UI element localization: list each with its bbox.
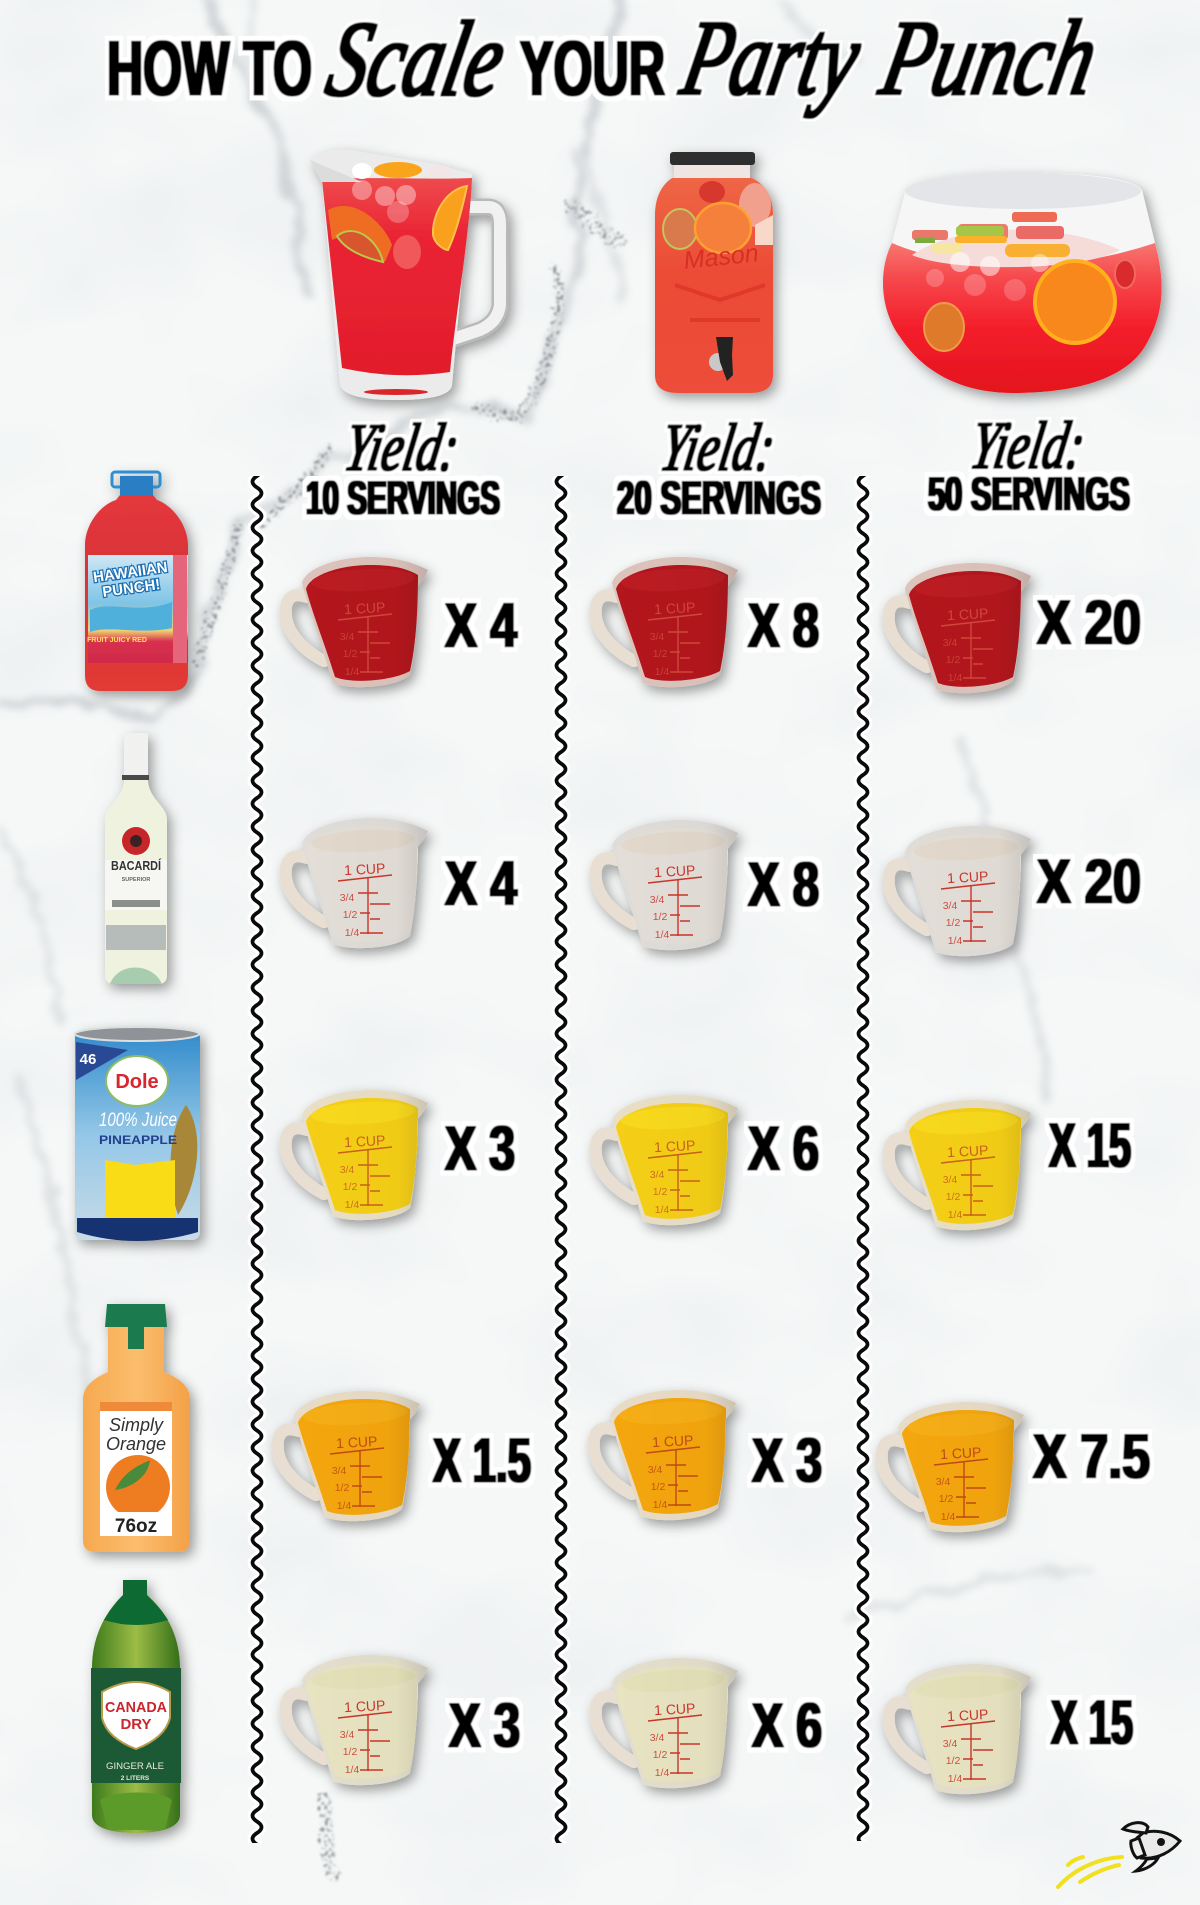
cup row 3: pineapple juice, 20 servings: 1/2 — [653, 1186, 667, 1198]
multiplier: x 6: X 6 — [748, 1114, 819, 1184]
cup row 5: ginger ale, 20 servings: 1/2 — [653, 1749, 667, 1761]
pitcher of punch — [310, 150, 500, 400]
cup row 2: rum, 20 servings — [596, 820, 738, 950]
cup row 3: pineapple juice, 50 servings: 1/2 — [946, 1191, 960, 1203]
cup row 1: punch, 10 servings: 1 CUP — [344, 599, 386, 617]
cup row 2: rum, 50 servings — [889, 826, 1031, 956]
cup row 4: orange juice, 50 servings: 1/2 — [939, 1493, 953, 1505]
cup row 4: orange juice, 10 servings: 1/2 — [335, 1482, 349, 1494]
yield script: Yield: — [965, 407, 1091, 483]
title: punch script: Punch — [871, 0, 1107, 118]
cup row 5: ginger ale, 50 servings: 1/4 — [948, 1773, 962, 1785]
cup row 1: punch, 20 servings: 3/4 — [650, 631, 664, 643]
title: scale script: Scale — [318, 0, 515, 119]
title: your: YOUR — [520, 24, 665, 112]
cup row 4: orange juice, 20 servings: 1/2 — [651, 1481, 665, 1493]
brand line 2: DRY — [120, 1716, 152, 1733]
multiplier: x 15: X 15 — [1049, 1111, 1131, 1181]
brand name: HAWAIIAN — [92, 559, 169, 586]
cup row 3: pineapple juice, 10 servings: 1 CUP — [344, 1132, 386, 1150]
multiplier: x 1.5: X 1.5 — [433, 1426, 531, 1496]
cup row 2: rum, 50 servings: 3/4 — [943, 900, 957, 912]
cup row 2: rum, 10 servings — [286, 818, 428, 948]
cup row 3: pineapple juice, 50 servings: 1 CUP — [947, 1142, 989, 1160]
cup row 5: ginger ale, 20 servings: 3/4 — [650, 1732, 664, 1744]
cup row 4: orange juice, 10 servings: 3/4 — [332, 1465, 346, 1477]
bottle: simply orange juice — [83, 1304, 190, 1552]
cup row 2: rum, 10 servings: 3/4 — [340, 892, 354, 904]
multiplier: x 20: X 20 — [1037, 847, 1141, 917]
cup row 1: punch, 10 servings: 3/4 — [340, 631, 354, 643]
cup row 4: orange juice, 20 servings: 1/4 — [653, 1499, 667, 1511]
cup row 3: pineapple juice, 20 servings — [596, 1095, 738, 1225]
cup row 5: ginger ale, 50 servings: 1 CUP — [947, 1706, 989, 1724]
brand name: BACARDÍ — [111, 858, 161, 873]
title — [107, 0, 1107, 119]
yield header: 20 servings — [617, 409, 821, 524]
cup row 3: pineapple juice, 50 servings: 1/4 — [948, 1209, 962, 1221]
cup row 5: ginger ale, 20 servings: 1/4 — [655, 1767, 669, 1779]
cup row 1: punch, 50 servings: 3/4 — [943, 637, 957, 649]
multiplier: x 4: X 4 — [445, 849, 517, 919]
servings count: 20 SERVINGS — [617, 471, 821, 524]
multiplier: x 15: X 15 — [1051, 1688, 1133, 1758]
cup row 2: rum, 10 servings: 1 CUP — [344, 860, 386, 878]
cup row 4: orange juice, 50 servings — [882, 1402, 1024, 1532]
cup row 5: ginger ale, 10 servings: 1 CUP — [344, 1697, 386, 1715]
cup row 5: ginger ale, 20 servings: 1 CUP — [654, 1700, 696, 1718]
cup row 1: punch, 20 servings — [596, 557, 738, 687]
size: 76oz — [115, 1516, 157, 1537]
multiplier: x 20: X 20 — [1037, 588, 1141, 658]
cup row 1: punch, 10 servings — [286, 557, 428, 687]
multiplier: x 3: X 3 — [752, 1426, 822, 1496]
bottle: bacardi rum — [105, 733, 167, 984]
cup row 3: pineapple juice, 10 servings: 1/2 — [343, 1181, 357, 1193]
flavor: FRUIT JUICY RED — [87, 637, 147, 644]
title: how to: HOW TO — [107, 24, 312, 112]
punch bowl — [883, 173, 1162, 393]
yield script: Yield: — [339, 409, 465, 485]
cup row 1: punch, 50 servings: 1/2 — [946, 654, 960, 666]
cup row 2: rum, 10 servings: 1/4 — [345, 927, 359, 939]
multiplier: x 8: X 8 — [748, 850, 819, 920]
cup row 4: orange juice, 20 servings: 3/4 — [648, 1464, 662, 1476]
title: party script: Party — [672, 0, 871, 118]
brand line 2: Orange — [106, 1434, 166, 1454]
cup row 5: ginger ale, 50 servings: 1/2 — [946, 1755, 960, 1767]
juice claim: 100% Juice — [99, 1110, 177, 1131]
multiplier: x 4: X 4 — [445, 591, 517, 661]
variety: SUPERIOR — [122, 877, 150, 883]
brand line 1: Simply — [109, 1415, 164, 1435]
cup row 5: ginger ale, 10 servings: 1/4 — [345, 1764, 359, 1776]
multiplier: x 3: X 3 — [445, 1114, 515, 1184]
cup row 3: pineapple juice, 20 servings: 1 CUP — [654, 1137, 696, 1155]
multiplier: x 3: X 3 — [449, 1691, 520, 1761]
cup row 5: ginger ale, 10 servings: 1/2 — [343, 1746, 357, 1758]
brand line 1: CANADA — [105, 1699, 167, 1716]
drink dispenser jar — [655, 152, 773, 393]
cup row 1: punch, 50 servings — [889, 563, 1031, 693]
cup row 3: pineapple juice, 10 servings: 3/4 — [340, 1164, 354, 1176]
weight: 46 — [80, 1051, 96, 1068]
cup row 3: pineapple juice, 20 servings: 1/4 — [655, 1204, 669, 1216]
cup row 2: rum, 20 servings: 1/2 — [653, 911, 667, 923]
cup row 1: punch, 10 servings: 1/4 — [345, 666, 359, 678]
cup row 4: orange juice, 20 servings: 1 CUP — [652, 1432, 694, 1450]
cup row 1: punch, 20 servings: 1 CUP — [654, 599, 696, 617]
product: GINGER ALE — [106, 1761, 164, 1771]
cup row 5: ginger ale, 50 servings: 3/4 — [943, 1738, 957, 1750]
cup row 3: pineapple juice, 10 servings: 1/4 — [345, 1199, 359, 1211]
cup row 2: rum, 50 servings: 1 CUP — [947, 868, 989, 886]
cup row 3: pineapple juice, 10 servings — [286, 1090, 428, 1220]
multiplier: x 6: X 6 — [752, 1691, 822, 1761]
cup row 5: ginger ale, 10 servings: 3/4 — [340, 1729, 354, 1741]
cup row 1: punch, 10 servings: 1/2 — [343, 648, 357, 660]
bottle: canada dry ginger ale — [91, 1580, 181, 1833]
cup row 3: pineapple juice, 20 servings: 3/4 — [650, 1169, 664, 1181]
cup row 5: ginger ale, 10 servings — [286, 1655, 428, 1785]
cup row 2: rum, 20 servings: 3/4 — [650, 894, 664, 906]
cup row 2: rum, 50 servings: 1/2 — [946, 917, 960, 929]
cup row 1: punch, 50 servings: 1 CUP — [947, 605, 989, 623]
cup row 5: ginger ale, 50 servings — [889, 1664, 1031, 1794]
cup row 5: ginger ale, 20 servings — [596, 1658, 738, 1788]
embossed jar lettering: Mason — [682, 239, 760, 275]
servings count: 10 SERVINGS — [306, 471, 500, 524]
size: 2 LITERS — [121, 1775, 150, 1782]
cup row 1: punch, 20 servings: 1/4 — [655, 666, 669, 678]
cup row 2: rum, 50 servings: 1/4 — [948, 935, 962, 947]
can: dole pineapple juice — [75, 1027, 200, 1241]
cup row 4: orange juice, 50 servings: 1/4 — [941, 1511, 955, 1523]
cup row 1: punch, 20 servings: 1/2 — [653, 648, 667, 660]
cup row 4: orange juice, 10 servings — [278, 1391, 420, 1521]
cup row 4: orange juice, 20 servings — [594, 1390, 736, 1520]
cup row 2: rum, 20 servings: 1/4 — [655, 929, 669, 941]
multiplier: x 7.5: X 7.5 — [1033, 1422, 1150, 1492]
cup row 3: pineapple juice, 50 servings: 3/4 — [943, 1174, 957, 1186]
flavor: PINEAPPLE — [99, 1133, 177, 1147]
multiplier: x 8: X 8 — [748, 591, 819, 661]
cup row 3: pineapple juice, 50 servings — [889, 1100, 1031, 1230]
yield script: Yield: — [655, 409, 781, 485]
cup row 4: orange juice, 10 servings: 1/4 — [337, 1500, 351, 1512]
brand name line 2: PUNCH! — [101, 576, 161, 601]
yield header: 10 servings — [306, 409, 500, 524]
cup row 2: rum, 20 servings: 1 CUP — [654, 862, 696, 880]
cup row 1: punch, 50 servings: 1/4 — [948, 672, 962, 684]
cup row 4: orange juice, 50 servings: 1 CUP — [940, 1444, 982, 1462]
brand: Dole — [115, 1071, 159, 1093]
cup row 4: orange juice, 10 servings: 1 CUP — [336, 1433, 378, 1451]
cup row 2: rum, 10 servings: 1/2 — [343, 909, 357, 921]
icon: rocket logo — [1058, 1823, 1180, 1887]
yield header: 50 servings — [928, 407, 1130, 520]
cup row 4: orange juice, 50 servings: 3/4 — [936, 1476, 950, 1488]
bottle: hawaiian punch — [85, 472, 188, 691]
